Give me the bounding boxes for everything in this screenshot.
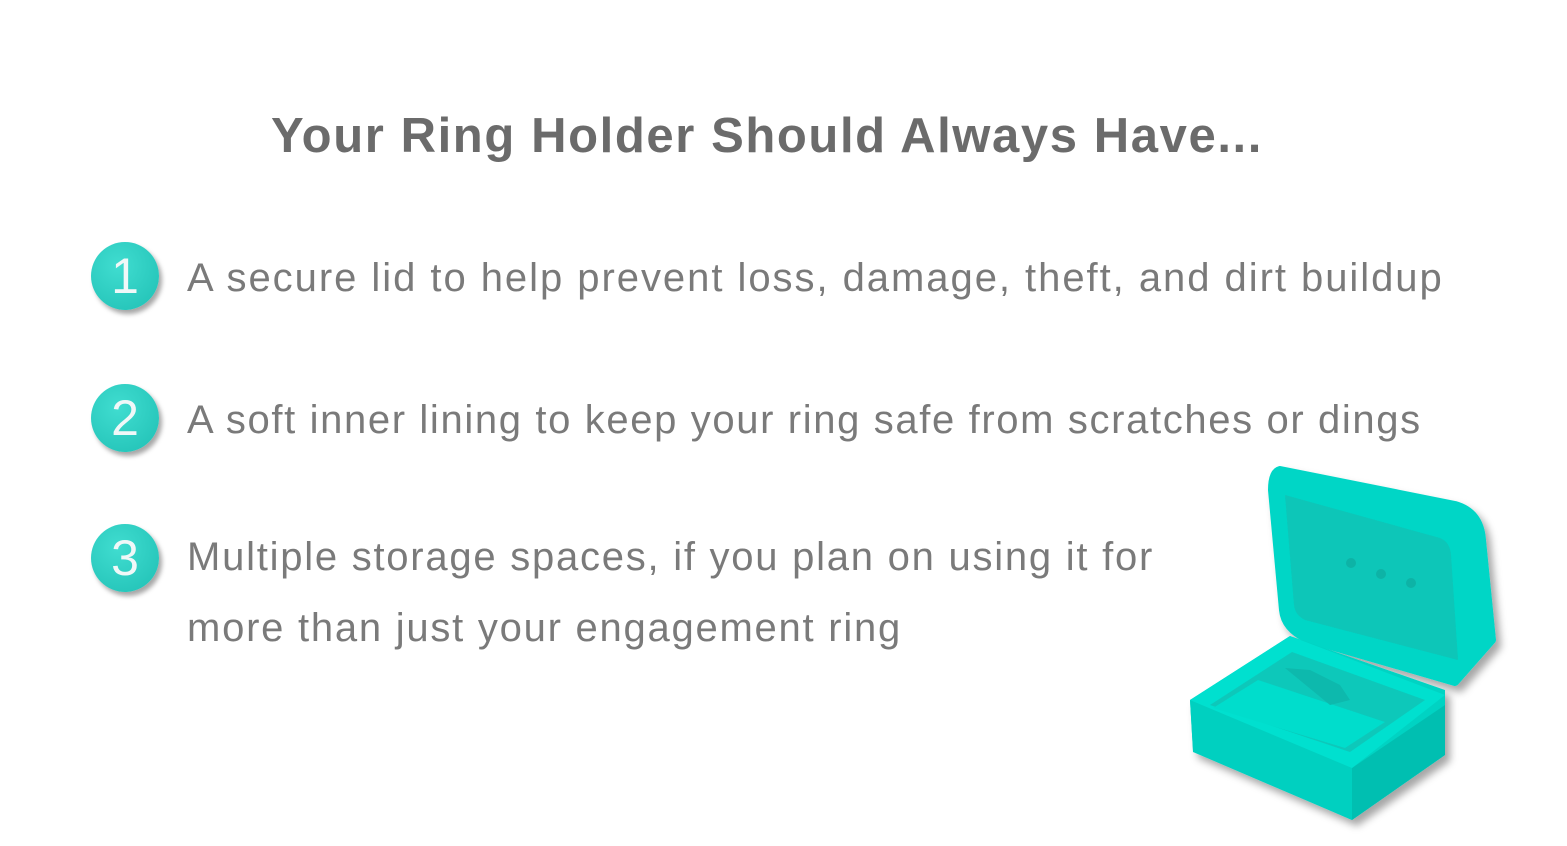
item 2 text: A soft inner lining to keep your ring safe from scratches or dings	[187, 398, 1422, 442]
item 3 text	[187, 535, 1154, 650]
base	[1190, 636, 1445, 820]
badge 1: 1	[111, 248, 139, 304]
badge 1	[91, 242, 159, 310]
item 1 text: A secure lid to help prevent loss, damage, theft, and dirt buildup	[187, 256, 1444, 300]
badge 3: 3	[111, 530, 139, 586]
lid	[1272, 470, 1492, 682]
title: Your Ring Holder Should Always Have...	[271, 109, 1263, 163]
badge 2: 2	[111, 390, 139, 446]
item 3 text: more than just your engagement ring	[187, 606, 902, 650]
item 3 text: Multiple storage spaces, if you plan on using it for	[187, 535, 1154, 579]
badge 3	[91, 524, 159, 592]
badge 2	[91, 384, 159, 452]
